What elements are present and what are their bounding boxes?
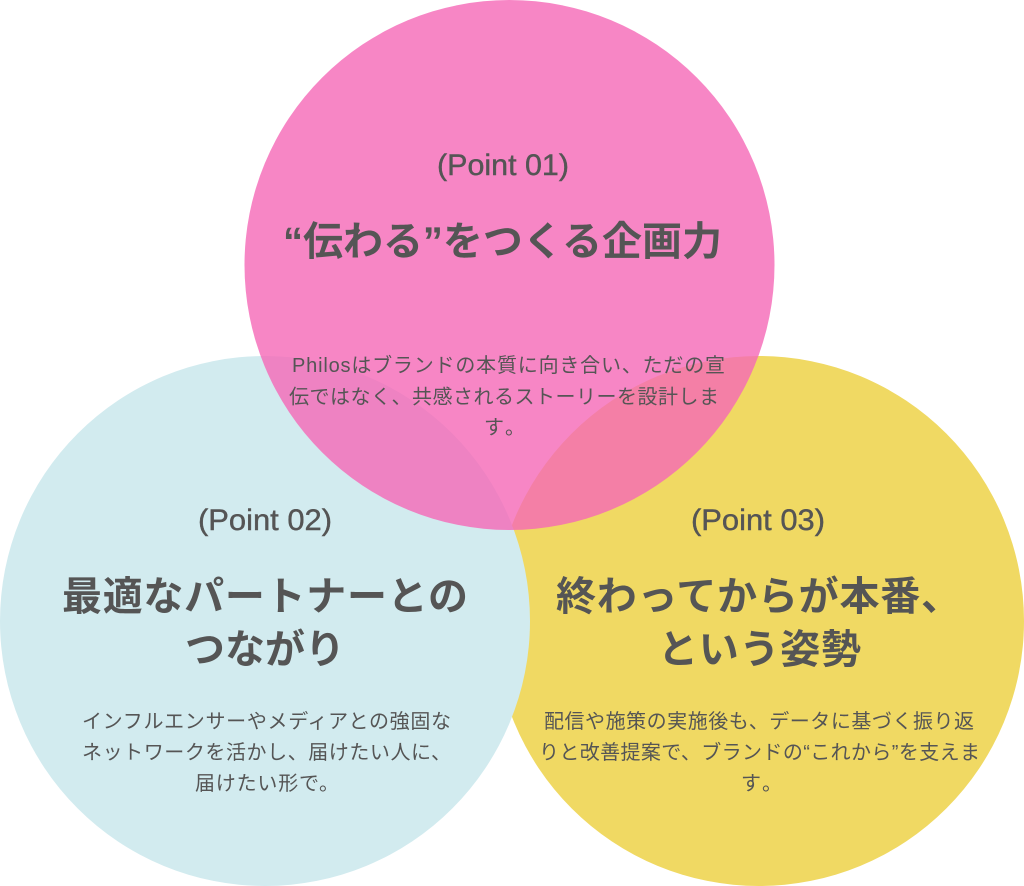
body text: point 01: 伝ではなく、共感されるストーリーを設計しま: [289, 386, 719, 408]
body text: point 02: インフルエンサーやメディアとの強固な: [82, 710, 451, 733]
body text: point 03: す。: [741, 773, 782, 795]
body text: point 02: 届けたい形で。: [195, 772, 339, 795]
heading: point 02: つながり: [185, 628, 345, 672]
body text: point 03: 配信や施策の実施後も、データに基づく振り返: [544, 710, 974, 733]
circle: point 01: [244, 0, 774, 530]
panel: point 02 text: [62, 504, 468, 795]
heading: point 01: “伝わる”をつくる企画力: [283, 220, 722, 264]
label: Point 03: (Point 03): [691, 504, 825, 537]
panel: point 03 text: [539, 504, 980, 795]
body text: point 03: [539, 710, 980, 795]
heading: point 03: 終わってからが本番、: [556, 575, 961, 619]
heading: point 02: [62, 575, 468, 672]
circle: point 02: [0, 356, 530, 886]
heading: point 02: 最適なパートナーとの: [62, 575, 468, 619]
heading: point 03: [556, 575, 961, 672]
circle: point 03: [494, 356, 1024, 886]
body text: point 01: [289, 353, 725, 439]
label: Point 01: (Point 01): [437, 149, 569, 182]
body text: point 02: ネットワークを活かし、届けたい人に、: [82, 741, 451, 764]
body text: point 01: Philosはブランドの本質に向き合い、ただの宣: [292, 353, 725, 377]
body text: point 01: す。: [484, 417, 525, 439]
panel: point 01 text: [283, 149, 725, 439]
body text: point 02: [82, 710, 451, 795]
label: Point 02: (Point 02): [198, 504, 332, 537]
body text: point 03: りと改善提案で、ブランドの“これから”を支えま: [539, 740, 980, 764]
heading: point 03: という姿勢: [658, 628, 861, 672]
